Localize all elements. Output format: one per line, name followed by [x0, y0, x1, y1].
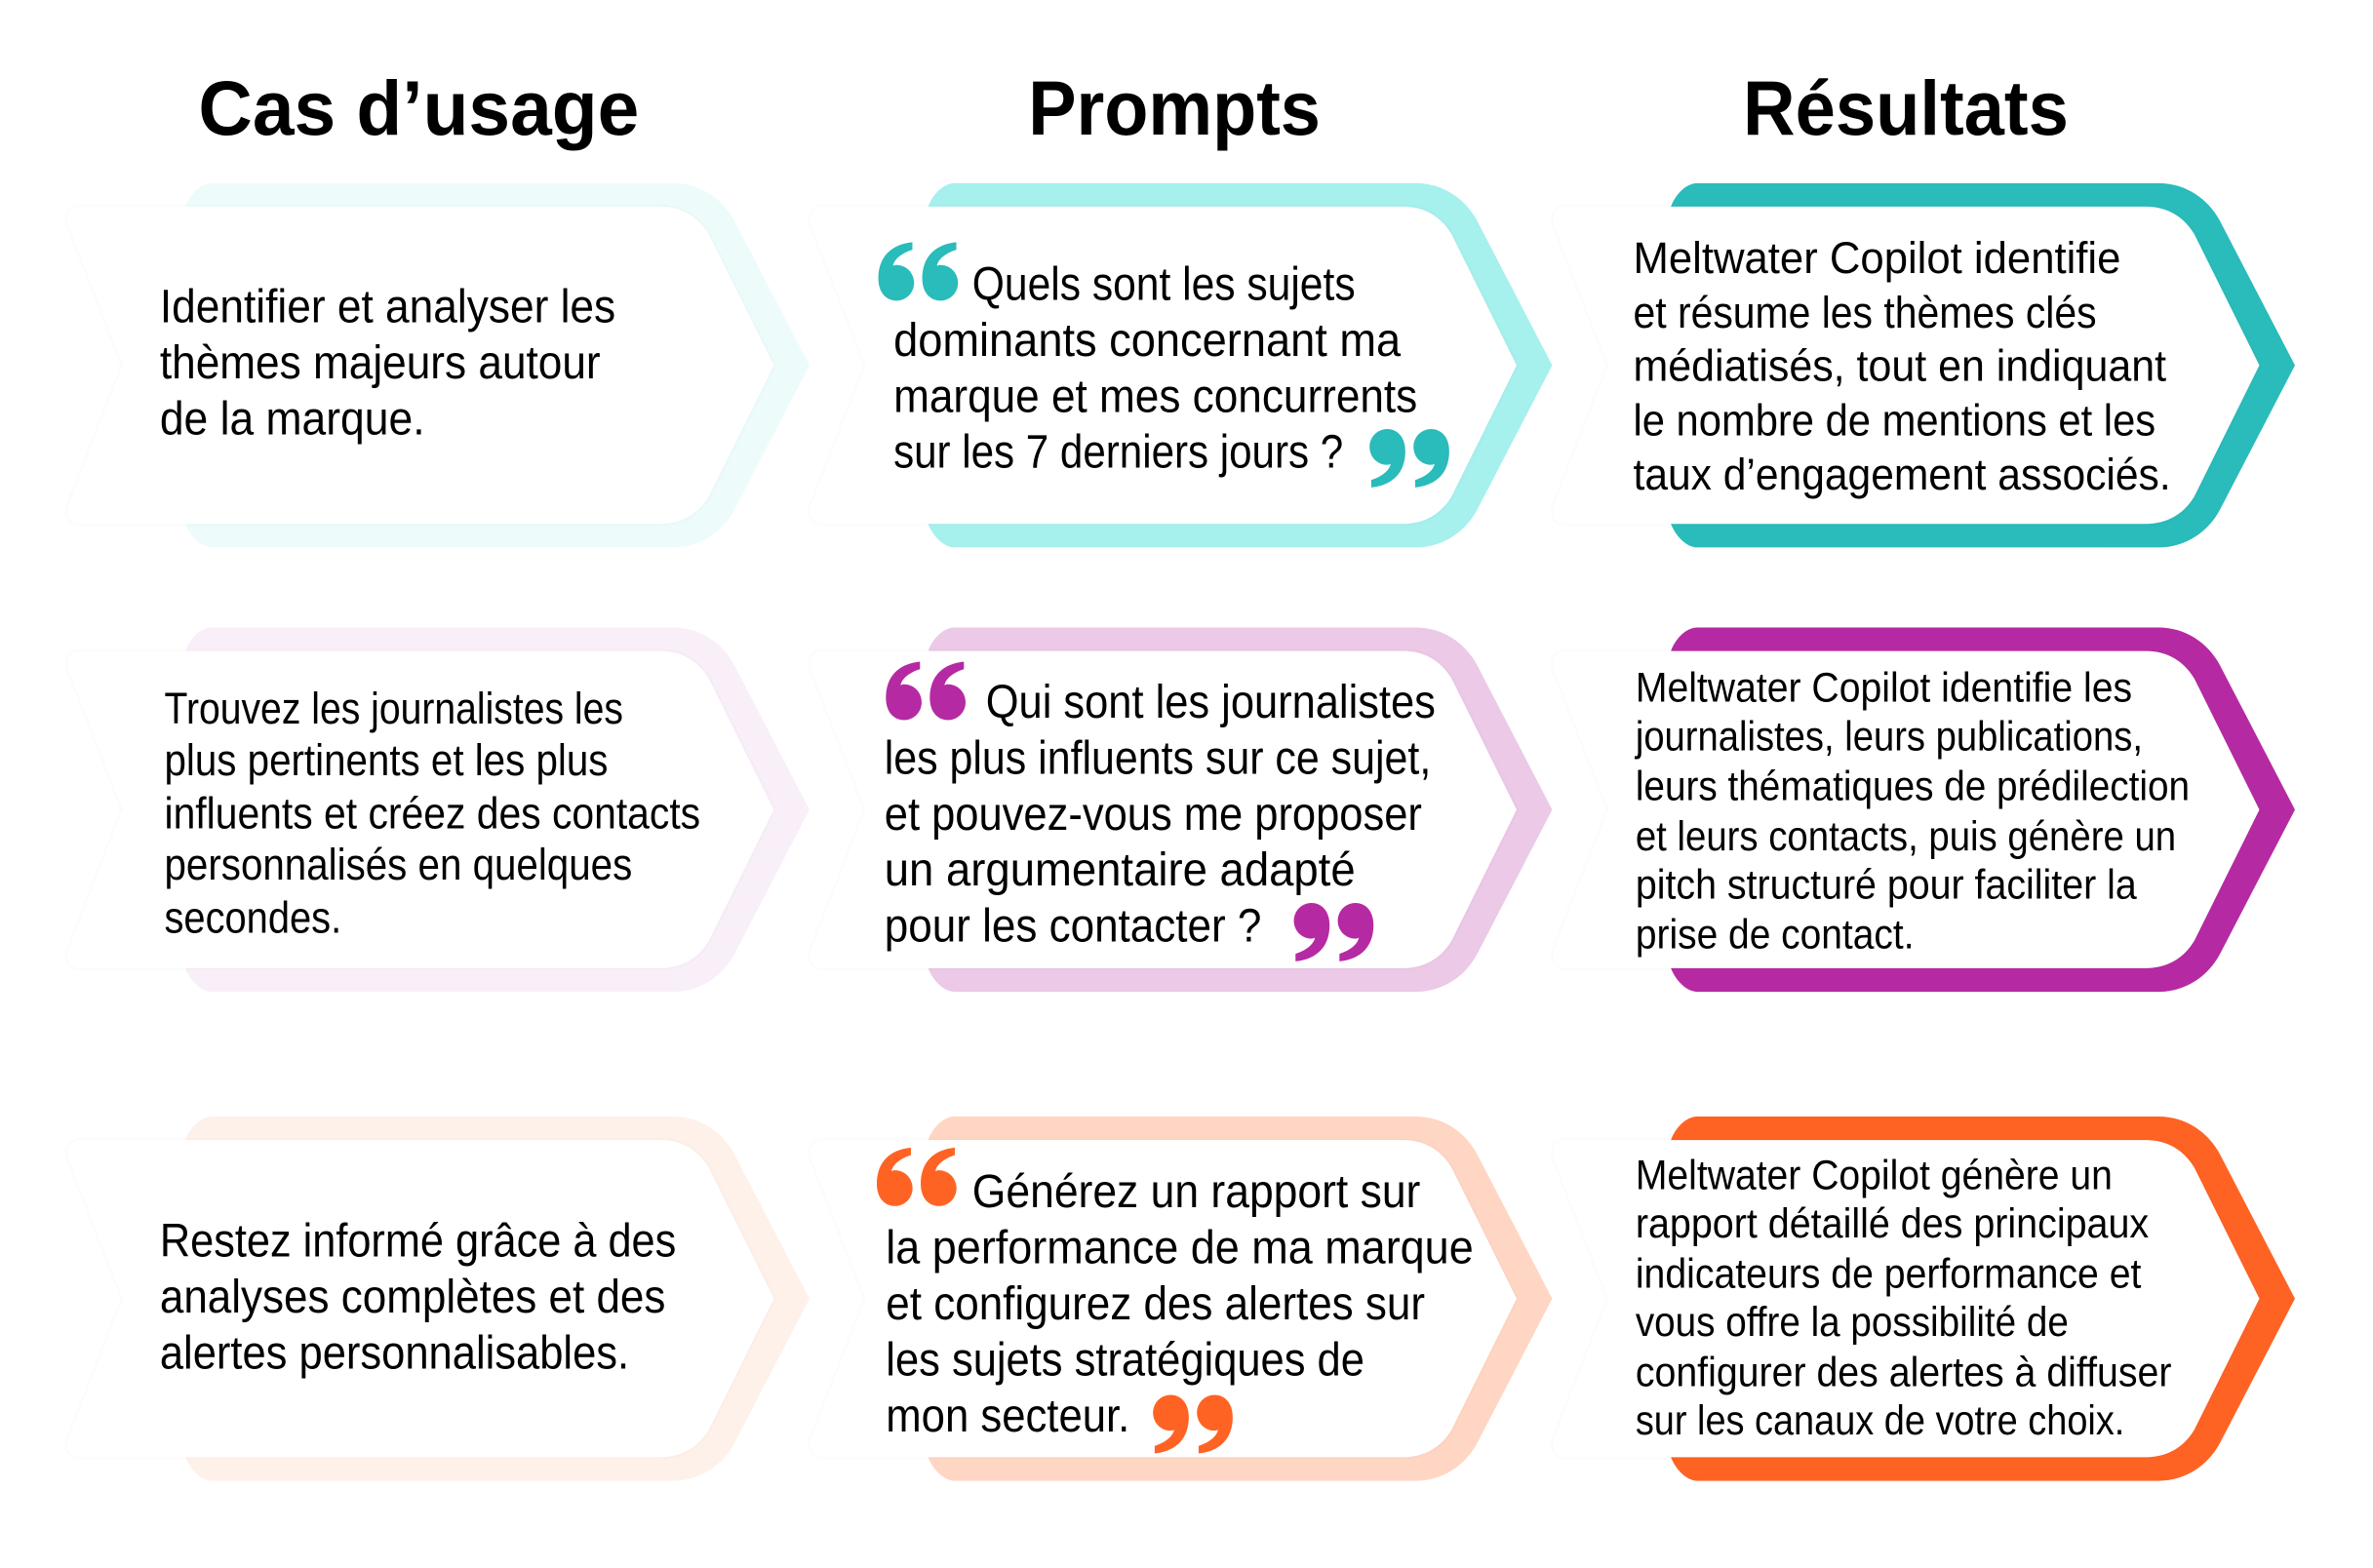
text: result 3: vous offre la possibilité de — [1636, 1299, 2069, 1346]
text: result 2: journalistes, leurs publications, — [1634, 713, 2143, 760]
text: result 3: configurer des alertes à diffuser — [1636, 1349, 2171, 1395]
text: use case 2: influents et créez des contacts — [165, 788, 700, 838]
text: use case 1: thèmes majeurs autour — [160, 336, 601, 389]
text: result 2: prise de contact. — [1636, 912, 1915, 959]
text: result 2 — [1634, 665, 2190, 959]
text: use case 3: Restez informé grâce à des — [160, 1215, 676, 1268]
text: prompt 3: les sujets stratégiques de — [886, 1334, 1364, 1387]
text: prompt 1 — [893, 257, 1417, 479]
text: result 1 — [1634, 233, 2171, 499]
text: result 3: Meltwater Copilot génère un — [1636, 1153, 2113, 1199]
text: use case 1: Identifier et analyser les — [160, 281, 615, 333]
text: result 3: indicateurs de performance et — [1636, 1250, 2142, 1297]
text: result 3 — [1636, 1153, 2171, 1444]
text: prompt 3: et configurez des alertes sur — [886, 1277, 1425, 1330]
text: prompt 2: et pouvez-vous me proposer — [885, 788, 1422, 841]
text: result 1: taux d’engagement associés. — [1634, 450, 2171, 499]
text: result 1: Meltwater Copilot identifie — [1634, 233, 2120, 283]
panel: prompt, row 3 — [811, 1117, 1552, 1481]
text: prompt 1: Quels sont les sujets — [972, 257, 1356, 310]
text: use case 3 — [160, 1215, 676, 1380]
text: use case 1: de la marque. — [160, 393, 425, 446]
text: prompt 3: mon secteur. — [886, 1390, 1129, 1442]
text: prompt 1: dominants concernant ma — [893, 314, 1401, 367]
text: use case 3: alertes personnalisables. — [160, 1327, 629, 1380]
panel: result, row 1 — [1553, 183, 2295, 547]
icon: closing quote — [1369, 429, 1449, 488]
text: use case 2: Trouvez les journalistes les — [165, 684, 623, 733]
text: prompt 2: un argumentaire adapté — [885, 843, 1356, 896]
text: result 2: et leurs contacts, puis génère un — [1636, 813, 2176, 860]
text: result 2: leurs thématiques de prédilection — [1636, 764, 2190, 810]
text: use case 3: analyses complètes et des — [160, 1271, 665, 1323]
panel: use case, row 3 — [67, 1117, 810, 1481]
text: use case 2: secondes. — [165, 892, 341, 942]
text: result 2: Meltwater Copilot identifie les — [1636, 665, 2132, 712]
text: result 1: et résume les thèmes clés — [1634, 288, 2097, 337]
text: prompt 2: pour les contacter ? — [885, 900, 1261, 953]
heading: Cas d'usage: Cas d’usage — [198, 64, 639, 151]
panel: result, row 3 — [1553, 1117, 2295, 1481]
text: prompt 2: les plus influents sur ce sujet, — [885, 731, 1431, 784]
text: result 1: médiatisés, tout en indiquant — [1634, 340, 2166, 390]
text: use case 2: personnalisés en quelques — [165, 840, 632, 889]
heading: Prompts: Prompts — [1028, 64, 1321, 151]
text: use case 2 — [165, 684, 700, 942]
text: prompt 2 — [885, 676, 1436, 953]
text: result 3: sur les canaux de votre choix. — [1636, 1397, 2124, 1444]
panel: prompt, row 2 — [811, 628, 1552, 992]
text: use case 2: plus pertinents et les plus — [165, 735, 608, 785]
icon: opening quote — [877, 1148, 957, 1206]
panel: result, row 2 — [1553, 628, 2295, 992]
text: prompt 3 — [886, 1165, 1474, 1442]
icon: closing quote — [1153, 1395, 1233, 1453]
text: result 2: pitch structuré pour faciliter la — [1636, 861, 2137, 908]
text: prompt 1: marque et mes concurrents — [893, 370, 1417, 422]
icon: closing quote — [1294, 903, 1373, 961]
panel: use case, row 1 — [67, 183, 810, 547]
icon: opening quote — [886, 661, 966, 720]
panel: prompt, row 1 — [811, 183, 1552, 547]
text: result 1: le nombre de mentions et les — [1634, 395, 2155, 445]
text: prompt 1: sur les 7 derniers jours ? — [893, 426, 1343, 479]
heading: Résultats: Résultats — [1743, 64, 2069, 151]
panel: use case, row 2 — [67, 628, 810, 992]
text: prompt 2: Qui sont les journalistes — [986, 676, 1436, 728]
text: use case 1 — [160, 281, 615, 446]
text: result 3: rapport détaillé des principaux — [1636, 1200, 2149, 1247]
text: prompt 3: la performance de ma marque — [886, 1222, 1474, 1274]
text: prompt 3: Générez un rapport sur — [972, 1165, 1420, 1218]
icon: opening quote — [879, 242, 958, 300]
